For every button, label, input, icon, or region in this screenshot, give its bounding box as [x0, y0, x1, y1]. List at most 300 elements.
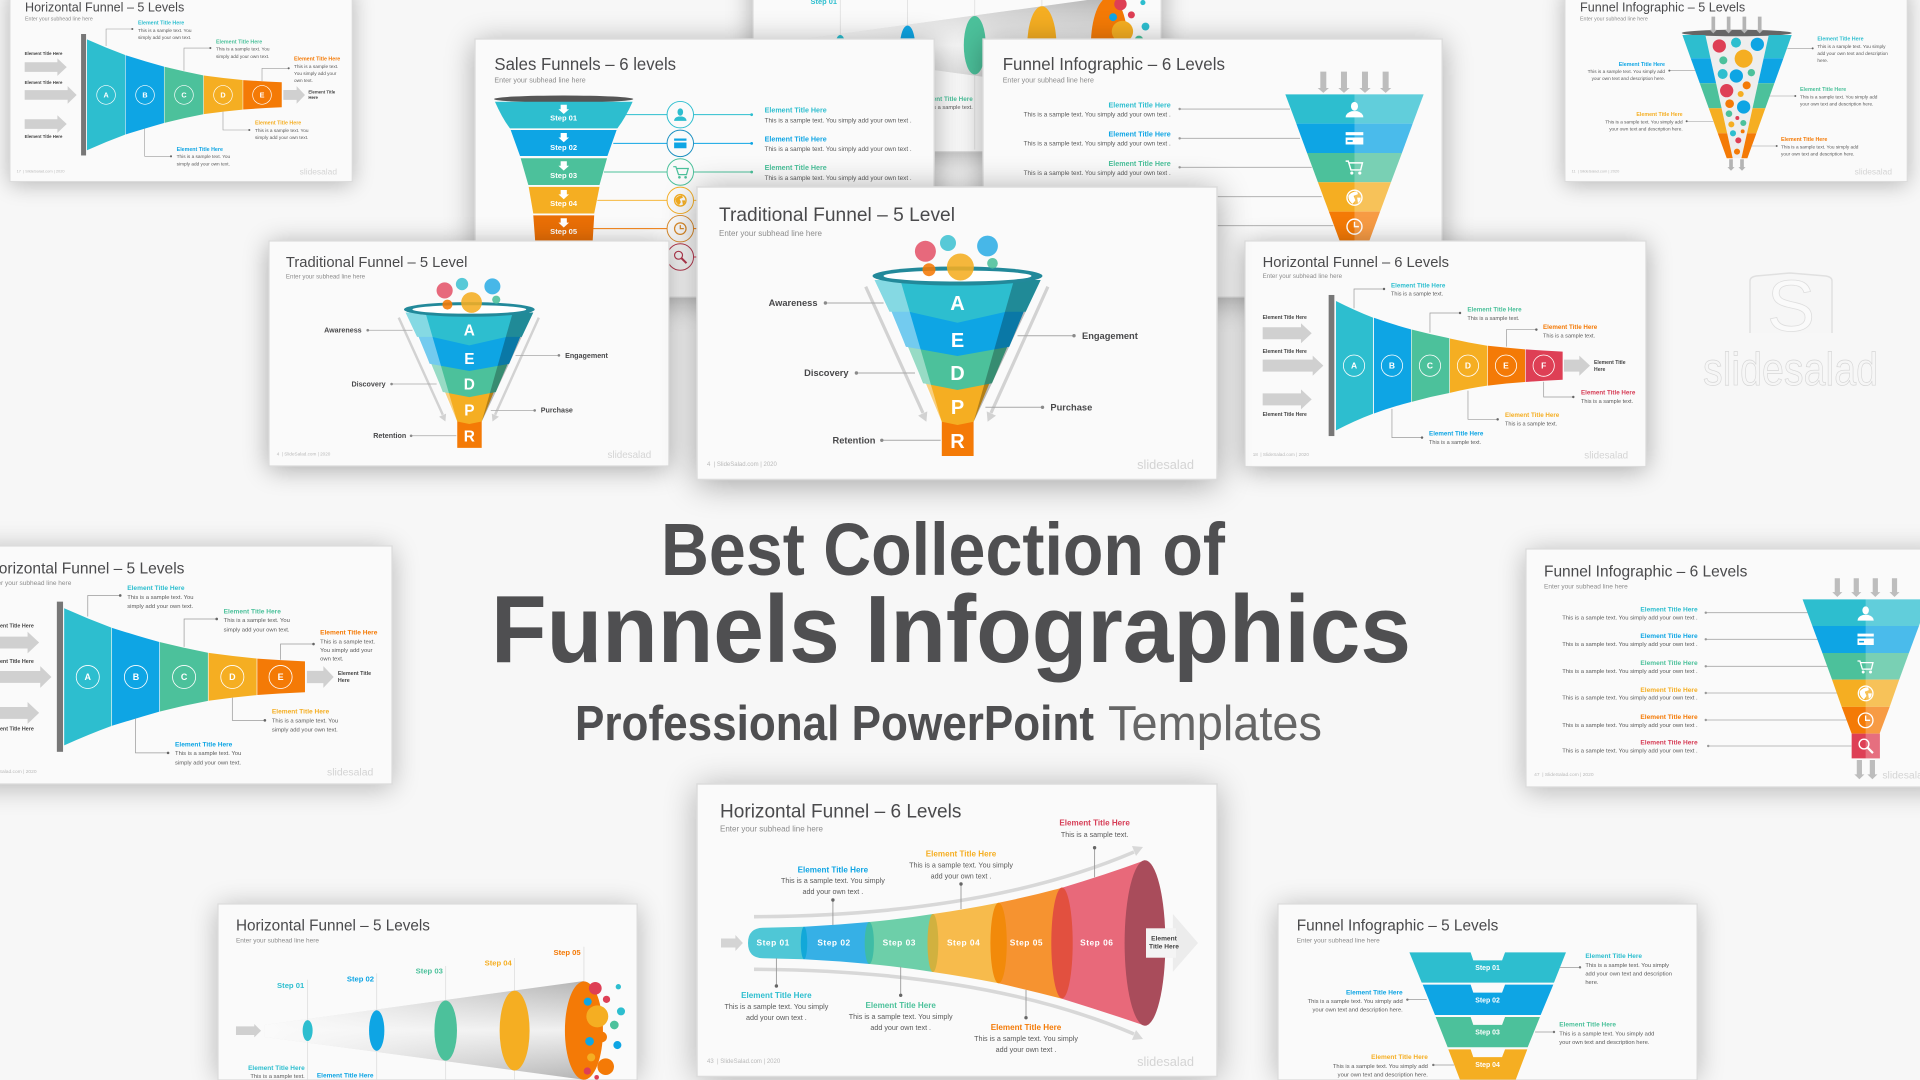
output arrow and label	[283, 86, 336, 104]
callout texts: simply add your own text.	[216, 54, 269, 60]
step labels: Step 03	[416, 967, 443, 976]
funnel stack: Step 04	[550, 199, 578, 208]
output arrow	[1145, 914, 1198, 972]
green callout	[918, 96, 973, 111]
panel: funnel infographic 5 levels with bubbles, top right	[1565, 0, 1907, 184]
callout texts: This is a sample text.	[1505, 422, 1558, 428]
callout texts: This is a sample text. You	[272, 719, 338, 725]
panel: sales funnels 6 levels	[475, 39, 934, 301]
slide title: Sales Funnels – 6 levels	[494, 54, 676, 74]
icon: search	[1859, 739, 1873, 753]
callout texts: add your own text .	[931, 872, 991, 880]
green callout: This is a sample text.	[920, 105, 973, 111]
output arrow and label: Here	[1594, 367, 1605, 373]
step labels: Step 02	[347, 974, 374, 983]
panel: traditional funnel 5 level, centre	[697, 187, 1217, 484]
callout texts	[724, 819, 1130, 1054]
step labels	[277, 948, 581, 990]
input arrows and labels	[0, 623, 51, 732]
funnel stack	[494, 96, 633, 251]
callout texts: your own text and description here.	[1312, 1008, 1403, 1014]
arrows in	[1318, 72, 1391, 93]
callout texts: This is a sample text.	[320, 640, 375, 646]
panel: horizontal funnel 5 levels, middle left	[0, 546, 392, 787]
callout texts: Element Title Here	[1640, 687, 1698, 694]
callout texts: Element Title Here	[320, 630, 378, 637]
stage labels	[769, 298, 1138, 445]
output label: Title Here	[1149, 944, 1179, 951]
watermark logo: slidesalad	[1703, 343, 1878, 395]
funnel chart: A	[950, 293, 965, 315]
callout texts: Element Title Here	[1059, 819, 1130, 828]
icon: globe	[1347, 190, 1362, 205]
connectors	[1668, 47, 1814, 147]
funnel chart	[1682, 17, 1792, 171]
slide title: Horizontal Funnel – 5 Levels	[236, 918, 430, 935]
callout texts: Element Title Here	[1640, 660, 1698, 667]
icon circles	[667, 101, 694, 270]
callout texts: Element Title Here	[224, 609, 281, 616]
panel: funnel infographic 6 levels, top	[983, 39, 1442, 301]
brand mark: slidesalad	[607, 450, 651, 461]
leader lines	[1178, 108, 1333, 226]
input arrow	[721, 935, 743, 951]
connectors	[1354, 288, 1575, 439]
callout texts: Element Title Here	[1581, 389, 1636, 396]
callout texts: This is a sample text. You simply add your own text .	[1562, 642, 1698, 648]
stage labels: Discovery	[351, 380, 386, 388]
funnel chart: A	[103, 91, 109, 100]
callout texts: This is a sample text.	[1429, 440, 1482, 446]
step labels: Step 01	[277, 981, 305, 990]
subhead: Enter your subhead line here	[286, 274, 366, 281]
callout texts: This is a sample text.	[1391, 292, 1444, 298]
callout texts: Element Title Here	[138, 21, 184, 27]
funnel bands	[1409, 952, 1566, 1080]
callout texts: Element Title Here	[248, 1065, 305, 1072]
callout texts: add your own text .	[870, 1023, 931, 1032]
callout texts: You simply add your	[294, 71, 337, 77]
funnel chart: E	[464, 351, 474, 368]
callout texts: This is a sample text. You simply	[849, 1012, 953, 1021]
callout texts: simply add your own text.	[177, 162, 230, 168]
callout texts: Element Title Here	[294, 57, 340, 63]
funnel chart: Step 02	[817, 938, 851, 948]
icon: person	[1346, 102, 1363, 117]
callout texts: This is a sample text. You simply add	[1800, 94, 1878, 100]
funnel bands	[1803, 599, 1920, 758]
callout texts	[127, 585, 378, 766]
callout texts: Element Title Here	[1371, 1054, 1428, 1061]
callout texts: This is a sample text.	[1581, 399, 1634, 405]
callout texts: This is a sample text. You simply	[909, 860, 1013, 870]
footer: 17 | SlideSalad.com | 2020	[17, 169, 65, 174]
funnel chart: D	[464, 376, 475, 393]
callout texts: This is a sample text.	[1467, 316, 1520, 322]
callout texts: This is a sample text. You simply add your own text .	[1562, 669, 1698, 675]
callout texts: Element Title Here	[1640, 633, 1698, 640]
icon: person	[1858, 606, 1874, 621]
callout texts: This is a sample text.	[1543, 333, 1596, 339]
funnel chart: Step 04	[947, 938, 980, 948]
funnel chart: R	[464, 429, 475, 446]
icon: card	[674, 139, 686, 148]
panel: funnel infographic 6 levels, middle right	[1526, 549, 1920, 790]
callout texts: simply add your own text.	[255, 135, 308, 141]
step labels: Step 04	[485, 959, 513, 968]
connectors	[88, 594, 315, 754]
callout texts: Element Title Here	[1505, 412, 1560, 419]
subheading: professional powerpoint: Professional PowerPoint	[575, 697, 1094, 751]
callout texts: your own text and description here.	[1592, 76, 1665, 82]
stage labels: Discovery	[804, 368, 849, 378]
funnel chart: D	[950, 363, 965, 385]
callout texts: Element Title Here	[1781, 137, 1827, 143]
output arrow and label: Element Title	[338, 671, 371, 677]
callout texts: This is a sample text. You	[224, 618, 290, 624]
callout texts: your own text and description here.	[1800, 101, 1873, 107]
funnel stack: Step 01	[550, 114, 577, 123]
input arrows and labels	[25, 51, 77, 139]
slide title: Traditional Funnel – 5 Level	[286, 254, 467, 271]
callout texts: This is a sample text. You	[216, 47, 270, 53]
callout texts: Element Title Here	[926, 849, 997, 858]
output arrow and label: Here	[308, 95, 319, 100]
connector lines	[592, 115, 751, 257]
callout texts: Element Title Here	[1467, 307, 1522, 314]
icon: person	[674, 108, 686, 121]
cone chart	[799, 0, 1149, 150]
funnel bands	[1285, 94, 1424, 241]
funnel chart: Step 03	[883, 938, 916, 948]
callout texts: Element Title Here	[1346, 989, 1403, 996]
callout texts: This is a sample text. You simply add your own text .	[765, 117, 912, 124]
output arrow and label	[307, 666, 371, 688]
callout texts: your own text and description here.	[1338, 1073, 1428, 1079]
callout texts: This is a sample text. You simply add your own text .	[1024, 111, 1171, 118]
callout texts: Element Title Here	[1585, 953, 1642, 960]
input arrows and labels: Element Title Here	[25, 51, 63, 56]
brand mark: slidesalad	[1584, 450, 1628, 461]
connectors	[106, 28, 290, 157]
callout texts: your own text and description here.	[1559, 1040, 1650, 1046]
output arrow and label: Element Title	[1594, 360, 1626, 366]
slide title: Funnel Infographic – 5 Levels	[1297, 918, 1498, 935]
callout texts: This is a sample text. You simply add	[1781, 144, 1859, 150]
callout texts: This is a sample text. You	[175, 751, 241, 757]
callout texts: add your own text .	[996, 1045, 1056, 1054]
callout texts: simply add your own text.	[272, 727, 338, 733]
footer: 18 | SlideSalad.com | 2020	[1253, 452, 1309, 457]
funnel chart: B	[133, 672, 140, 682]
panel: horizontal funnel 6 levels, bottom centre	[697, 784, 1217, 1079]
brand mark: slidesalad	[1137, 457, 1194, 472]
funnel chart: B	[142, 91, 148, 100]
callout texts: This is a sample text. You simply add	[1559, 1031, 1654, 1037]
callout texts: This is a sample text. You simply add your own text .	[1024, 140, 1171, 147]
callout texts: Element Title Here	[1559, 1021, 1616, 1028]
panel: horizontal funnel 5 levels, top centre (behind)	[753, 0, 1161, 155]
funnel chart: B	[1389, 361, 1395, 371]
side arrows	[399, 318, 539, 421]
callout texts: This is a sample text. You simply	[1585, 963, 1669, 969]
icon: globe	[1858, 686, 1873, 701]
funnel chart: Step 05	[1010, 938, 1043, 948]
panel: horizontal funnel 6 levels, right	[1245, 241, 1646, 470]
callout texts: This is a sample text. You simply add	[1605, 119, 1683, 125]
icon: clock	[675, 223, 686, 234]
funnel chart: E	[260, 91, 265, 100]
callout texts	[1588, 37, 1888, 157]
callout texts: simply add your own text.	[127, 604, 194, 610]
output arrow and label: Here	[338, 678, 350, 684]
heading: funnels infographics: Funnels Infographics	[491, 576, 1411, 683]
output arrow and label	[1564, 356, 1626, 376]
callout texts: This is a sample text. You simply add your own text .	[1562, 748, 1698, 754]
slide title: Traditional Funnel – 5 Level	[719, 204, 955, 226]
callout texts: here.	[1585, 980, 1599, 986]
subhead: Enter your subhead line here	[25, 17, 93, 23]
brand mark: slidesalad	[1855, 167, 1892, 177]
connectors	[775, 846, 1096, 1019]
watermark logo: S	[1767, 267, 1815, 347]
callout texts: This is a sample text. You simply add	[1308, 999, 1403, 1005]
funnel chart: A	[464, 323, 475, 340]
callout texts: Element Title Here	[765, 135, 827, 143]
funnel bands: Step 04	[1475, 1062, 1500, 1069]
funnel stack: Step 05	[550, 227, 577, 236]
funnel chart: A	[85, 672, 92, 682]
stage labels	[324, 327, 609, 440]
callout texts: add your own text .	[746, 1013, 807, 1022]
slide title: Horizontal Funnel – 6 Levels	[1263, 254, 1449, 271]
callout texts: Element Title Here	[1429, 430, 1484, 437]
icon: cart	[1346, 161, 1362, 175]
callout texts	[765, 107, 912, 182]
callout texts: This is a sample text. You	[127, 595, 193, 601]
funnel chart: Step 06	[1080, 938, 1113, 948]
callout texts: This is a sample text. You	[177, 154, 231, 160]
callout texts: Element Title Here	[1619, 62, 1665, 68]
callout texts: add your own text and description	[1817, 51, 1888, 57]
arrows in and out	[1832, 578, 1900, 779]
callout texts: add your own text and description	[1585, 972, 1672, 978]
stage labels: Purchase	[1050, 402, 1092, 412]
callout texts: This is a sample text. You simply add your own text .	[1562, 723, 1698, 729]
callout texts: add your own text .	[803, 887, 863, 896]
callout texts: This is a sample text. You simply add	[1333, 1064, 1428, 1070]
callout texts: This is a sample text. You simply	[974, 1034, 1078, 1043]
panel: funnel infographic 5 levels, bottom right	[1278, 904, 1697, 1080]
callout texts: Element Title Here	[991, 1023, 1062, 1032]
callout texts: your own text and description here.	[1781, 151, 1854, 157]
funnel chart: F	[1541, 361, 1546, 371]
callout texts	[1562, 606, 1698, 754]
callout texts	[1391, 282, 1636, 446]
callout texts: simply add your own text.	[175, 760, 241, 766]
icon: globe	[675, 195, 686, 206]
callout texts: Element Title Here	[1640, 739, 1698, 746]
input arrows and labels: Element Title Here	[25, 134, 63, 139]
callout texts: This is a sample text. You simply	[1817, 44, 1886, 50]
subhead: Enter your subhead line here	[1544, 583, 1628, 590]
subhead: Enter your subhead line here	[1580, 17, 1648, 23]
funnel chart	[57, 602, 305, 752]
callout texts: Element Title Here	[765, 164, 827, 172]
callout texts: Element Title Here	[1640, 714, 1698, 721]
icon: card	[1346, 132, 1363, 145]
callout texts: Element Title Here	[741, 991, 812, 1000]
funnel chart: C	[1427, 361, 1433, 371]
funnel bands: Step 01	[1475, 965, 1500, 972]
funnel chart	[1329, 295, 1563, 436]
green callout: Element Title Here	[918, 96, 973, 103]
brand mark: slidesalad	[327, 767, 374, 778]
funnel chart: P	[951, 397, 964, 419]
funnel chart: E	[278, 672, 284, 682]
callout texts: This is a sample text. You simply	[781, 876, 885, 885]
callout texts: This is a sample text. You	[255, 128, 309, 134]
callout texts	[248, 1065, 374, 1080]
footer: 4 | SlideSalad.com | 2020	[707, 462, 777, 468]
callout texts: Element Title Here	[317, 1073, 374, 1080]
callout texts: Element Title Here	[765, 107, 827, 115]
funnel chart: C	[181, 672, 188, 682]
callout texts: Element Title Here	[127, 585, 185, 592]
callout texts: This is a sample text.	[294, 64, 338, 70]
funnel chart: Step 01	[757, 938, 790, 948]
funnel chart	[81, 34, 282, 155]
callout texts: Element Title Here	[272, 709, 329, 716]
callout texts: here.	[1817, 58, 1828, 64]
footer: 4 | SlideSalad.com | 2020	[277, 452, 331, 457]
icon: cart	[673, 167, 688, 179]
subhead: Enter your subhead line here	[236, 938, 319, 945]
callout texts: Element Title Here	[1109, 160, 1171, 168]
stage labels: Engagement	[1082, 331, 1138, 341]
subhead: Enter your subhead line here	[1003, 76, 1094, 85]
callout texts: This is a sample text.	[1061, 830, 1128, 839]
icon: search	[675, 251, 686, 263]
slide title: Funnel Infographic – 6 Levels	[1544, 564, 1747, 581]
callout texts: Element Title Here	[865, 1001, 936, 1010]
funnel chart: E	[1503, 361, 1509, 371]
footer: 47 | SlideSalad.com | 2020	[1534, 772, 1594, 778]
callout texts: Element Title Here	[1391, 282, 1446, 289]
funnel chart: A	[1351, 361, 1357, 371]
funnel chart: R	[950, 431, 965, 453]
funnel stack: Step 03	[550, 171, 577, 180]
funnel bands: Step 03	[1475, 1030, 1500, 1037]
input arrow	[236, 1024, 261, 1037]
icon: cart	[1858, 661, 1873, 673]
cone chart	[265, 947, 625, 1080]
output arrow and label: Element Title	[308, 89, 336, 94]
stage labels: Retention	[373, 432, 406, 440]
callout texts	[1024, 101, 1171, 177]
subhead: Enter your subhead line here	[1297, 938, 1380, 945]
callout texts: own text.	[294, 78, 313, 84]
callout texts: simply add your own text.	[224, 627, 290, 633]
callout texts: Element Title Here	[1543, 324, 1598, 331]
connectors	[1406, 966, 1581, 1066]
icon: clock	[1347, 219, 1362, 234]
callout texts	[138, 21, 340, 168]
input arrows and labels: Element Title Here	[25, 80, 63, 85]
leader lines	[1705, 611, 1851, 747]
funnel chart	[404, 278, 535, 448]
slide title: Horizontal Funnel – 6 Levels	[720, 800, 962, 822]
heading: best collection of: Best Collection of	[661, 508, 1225, 591]
callout texts: This is a sample text. You simply add your own text .	[1562, 696, 1698, 702]
stage labels: Awareness	[769, 298, 818, 308]
input arrows and labels	[1263, 315, 1323, 418]
footer: 11 | SlideSalad.com | 2020	[1572, 169, 1620, 174]
output label: Element	[1151, 936, 1178, 943]
callout texts: Element Title Here	[1800, 87, 1846, 93]
panel: traditional funnel 5 level, left	[269, 241, 669, 469]
brand mark: slidesalad	[300, 167, 337, 177]
callout texts: Element Title Here	[216, 40, 262, 46]
watermark logo	[1703, 267, 1878, 395]
callout dots	[750, 113, 753, 173]
callout texts: own text.	[320, 657, 344, 663]
stage labels: Awareness	[324, 327, 362, 335]
callout texts: Element Title Here	[1109, 131, 1171, 139]
callout texts: This is a sample text. You	[138, 28, 192, 34]
panel: horizontal funnel 5 levels, top left	[10, 0, 352, 184]
funnel chart: D	[229, 672, 236, 682]
callout texts	[1308, 953, 1672, 1079]
subhead: Enter your subhead line here	[494, 76, 586, 85]
funnel chart: D	[220, 91, 226, 100]
callout texts: Element Title Here	[798, 865, 869, 874]
curved guide arrows	[754, 846, 1143, 1040]
callout texts: Element Title Here	[255, 121, 301, 127]
stage labels: Engagement	[565, 352, 609, 360]
callout texts: Element Title Here	[1817, 37, 1864, 43]
callout texts: Element Title Here	[177, 147, 223, 153]
output label	[1146, 928, 1179, 958]
step labels: Step 05	[554, 948, 581, 957]
brand mark: slidesalad	[1137, 1054, 1194, 1069]
subhead: Enter your subhead line here	[1263, 273, 1343, 280]
callout texts: This is a sample text. You simply add	[1588, 69, 1665, 75]
input arrows and labels: Element Title Here	[1263, 315, 1307, 321]
callout texts: Element Title Here	[1109, 101, 1171, 109]
callout texts: This is a sample text. You simply	[724, 1002, 829, 1011]
icon: clock	[1858, 713, 1873, 728]
callout texts: your own text and description here.	[1609, 126, 1683, 132]
callout texts: This is a sample text. You simply add your own text .	[765, 146, 912, 153]
callout texts: simply add your own text.	[138, 35, 191, 41]
input arrows and labels: Element Title Here	[1263, 412, 1307, 418]
funnel chart	[872, 235, 1042, 456]
footer: 43 | SlideSalad.com | 2020	[707, 1059, 781, 1065]
callout texts: Element Title Here	[1640, 606, 1698, 613]
input arrows and labels: Element Title Here	[1263, 349, 1307, 355]
callout texts: This is a sample text. You simply add your own text .	[765, 175, 912, 182]
subhead: Enter your subhead line here	[719, 229, 822, 238]
stage labels: Purchase	[541, 407, 573, 415]
funnel chart: E	[951, 330, 964, 352]
icon: card	[1858, 634, 1874, 645]
funnel bands: Step 02	[1475, 997, 1500, 1004]
callout texts: This is a sample text. You simply add your own text .	[1562, 615, 1698, 621]
funnel chart: C	[181, 91, 187, 100]
subhead: Enter your subhead line here	[720, 824, 823, 834]
side arrows	[866, 287, 1048, 422]
